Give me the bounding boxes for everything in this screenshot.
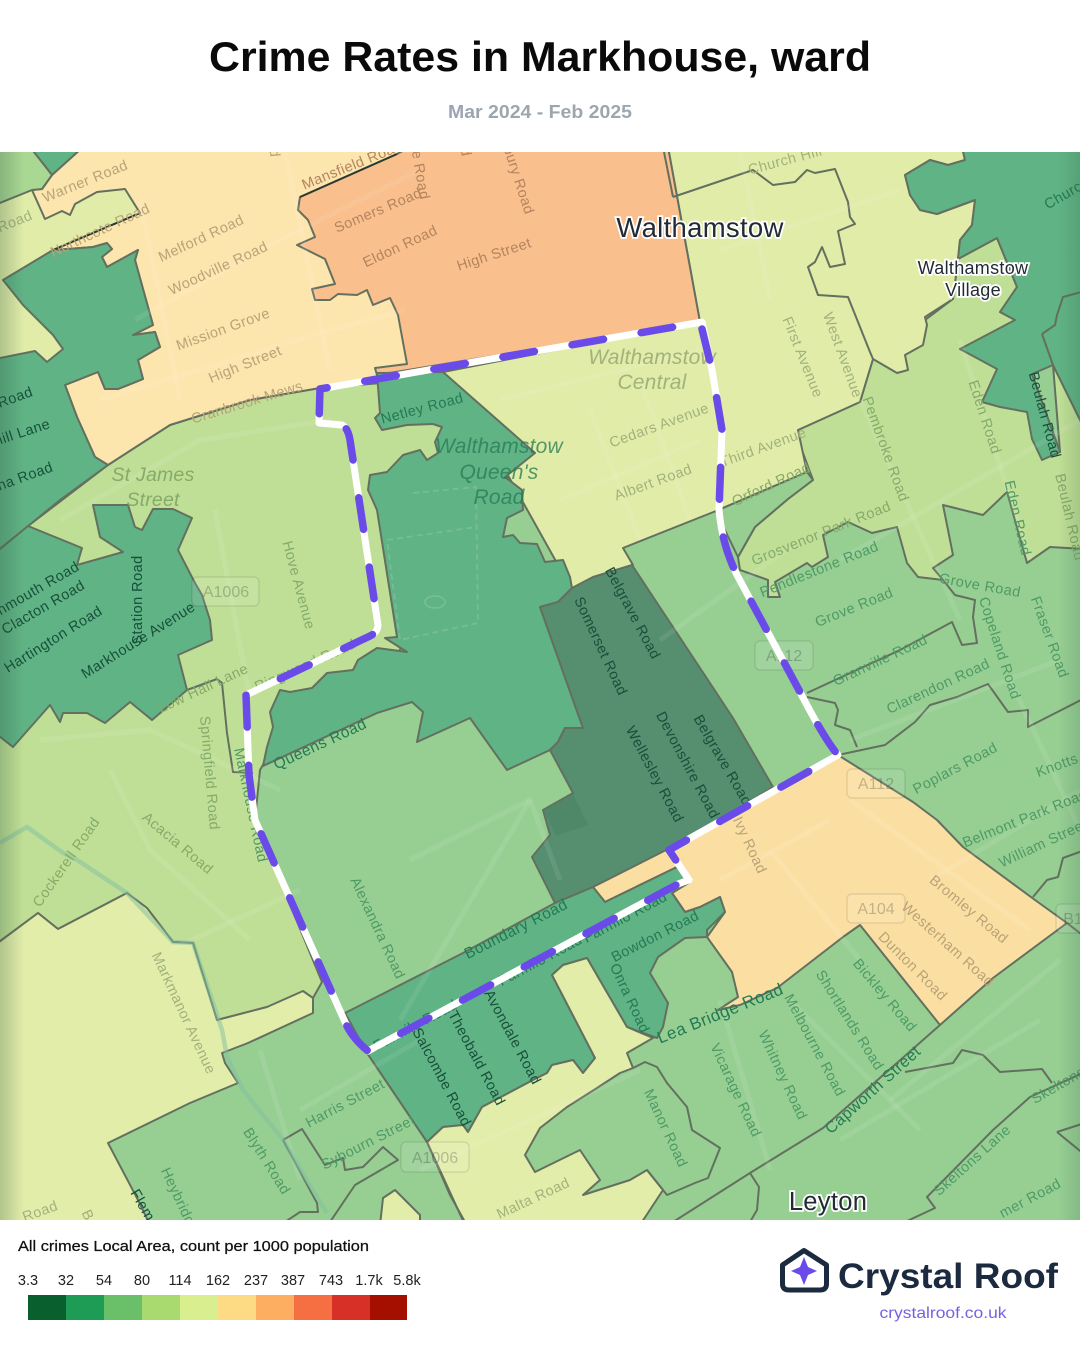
street and place labels: Knotts [1034, 751, 1080, 781]
street and place labels: Alexandra Road [347, 875, 408, 982]
place label: St James Street [112, 468, 194, 506]
street and place labels: bury Road [499, 144, 537, 217]
area: green band, Markhouse Avenue [0, 505, 212, 747]
street and place labels: Onra Road [606, 961, 652, 1036]
street and place labels: Melford Road [156, 212, 247, 266]
street and place labels: Eden Road [965, 378, 1003, 456]
street and place labels: Manor Road [640, 1087, 690, 1170]
street and place labels: Melbourne Road [780, 992, 848, 1099]
street and place labels: Ivy Road [729, 814, 769, 876]
street and place labels: Road [20, 1198, 60, 1226]
street and place labels: Farmilo Road [371, 997, 460, 1055]
faint street network [40, 150, 1080, 1180]
logo wordmark: Crystal Roof [838, 1257, 1058, 1296]
street and place labels: Eldon Road [361, 223, 440, 271]
area: green wedge at Orford Road [716, 472, 813, 557]
street and place labels: B [78, 1207, 96, 1223]
street and place labels: Vicarage Road [706, 1041, 764, 1140]
street and place labels: Church Hill [747, 143, 824, 179]
street and place labels: Sybourn Street [319, 1112, 418, 1173]
shield: A1006 south [401, 1142, 469, 1172]
area: orange band, Walthamstow town centre [297, 147, 700, 375]
street and place labels: Ringwood Road [252, 636, 358, 695]
street and place labels: Springfield Road [196, 715, 222, 831]
street and place labels: Belgrave Road [690, 712, 755, 809]
street and place labels: Heybridge [157, 1165, 201, 1236]
street and place labels: Hartington Road [2, 603, 105, 676]
street and place labels: Theobald Road [444, 1008, 508, 1109]
street and place labels: Clacton Road [0, 578, 88, 638]
legend colour scale [28, 1295, 407, 1320]
street and place labels: Clarendon Road [884, 656, 993, 718]
area: green band, Boundary Road [345, 867, 725, 1142]
street and place labels: Albert Road [612, 461, 694, 504]
place label: Walthamstow Queen's Road: Walthamstow [435, 435, 565, 458]
legend tick labels: 80 [134, 1273, 150, 1289]
street and place labels: Queens Road [271, 715, 369, 773]
place label: Walthamstow Central: Walthamstow [588, 346, 718, 369]
choropleth areas [0, 147, 1080, 1225]
area: green band north-west [0, 243, 160, 549]
street and place labels: Eden Road [1001, 479, 1033, 557]
place label: Walthamstow Village: Walthamstow [918, 258, 1029, 278]
street and place labels: Grove Road [813, 585, 896, 631]
street and place labels: Farmilo Road [581, 889, 670, 947]
street and place labels: Acacia Road [139, 810, 216, 878]
street and place labels: Netley Road [379, 390, 465, 428]
street and place labels: Harris Street [303, 1076, 388, 1131]
legend tick labels: 1.7k [355, 1273, 383, 1289]
park paths: Queen's Road recreation ground [387, 487, 478, 640]
place label: Leyton: Leyton [789, 1188, 867, 1216]
street and place labels: Grove Road [938, 571, 1022, 601]
street and place labels: Woodville Road [166, 239, 271, 299]
legend tick labels: 54 [96, 1273, 112, 1289]
street and place labels: Poplars Road [911, 740, 1000, 798]
place label: Walthamstow Village: Village [945, 280, 1001, 300]
shield: A1006 north [192, 577, 259, 606]
street and place labels: Grosvenor Park Road [749, 499, 893, 569]
place label: Walthamstow: Walthamstow [616, 212, 784, 243]
street and place labels: Warner Road [40, 158, 130, 206]
shield: A112 south [847, 769, 905, 798]
river Dagenham Brook [0, 827, 327, 1213]
legend tick labels: 114 [168, 1273, 192, 1289]
street and place labels: Capworth Street [822, 1043, 925, 1138]
area: pale band north-west [0, 189, 140, 362]
shield: A104: A104 [857, 901, 895, 918]
street and place labels: Salcombe Road [408, 1026, 474, 1129]
street and place labels: High Street [455, 235, 534, 275]
place label: Walthamstow Central [590, 348, 717, 389]
legend tick labels [18, 1273, 421, 1289]
street and place labels: mer Road [997, 1176, 1064, 1222]
street and place labels: Station Road [130, 555, 146, 645]
map edge vignette [0, 152, 1080, 1220]
street and place labels: Westerham Road [898, 899, 997, 990]
street and place labels: Hove Avenue [279, 539, 318, 631]
street and place labels: Skeltons Lane [931, 1122, 1014, 1199]
shield: A112 north: A112 [766, 648, 802, 665]
shield: A1006 south: A1006 [412, 1150, 458, 1167]
street and place labels: Flem [127, 1187, 158, 1224]
shield: A112 north [755, 641, 813, 670]
street and place labels: Boundary Road [462, 896, 571, 963]
street and place labels: Blyth Road [239, 1125, 293, 1198]
legend tick labels: 5.8k [393, 1273, 421, 1289]
logo url: crystalroof.co.uk [880, 1305, 1008, 1322]
street and place labels: Devonshire Road [652, 709, 722, 822]
street and place labels: Wellesley Road [622, 724, 686, 825]
street and place labels: Pembroke Road [859, 395, 911, 504]
area boundary lines [187, 152, 1080, 1222]
street and place labels: Markhouse Avenue [79, 599, 198, 682]
street and place labels: Bickley Road [849, 956, 919, 1035]
legend tick labels: 162 [206, 1273, 230, 1289]
street and place labels: High Street [206, 343, 284, 387]
area: pale band Walthamstow Central [443, 147, 975, 590]
road number shields [192, 577, 1080, 1172]
street and place labels: First Avenue [779, 315, 826, 400]
area: darkest green band, Belgrave Road [532, 565, 773, 903]
street and place labels: d [456, 147, 474, 158]
area: yellow band north-west, High Street [32, 147, 420, 465]
street and place labels: Orford Road [730, 460, 813, 510]
legend tick labels: 743 [319, 1273, 343, 1289]
street and place labels: Northcote Road [48, 201, 153, 261]
legend [18, 1239, 421, 1320]
legend tick labels: 32 [58, 1273, 74, 1289]
street and place labels: e Road [408, 149, 432, 201]
street and place labels: Fraser Road [1027, 594, 1071, 680]
street and place labels: Cedars Avenue [607, 401, 711, 451]
area: top-left green patch [35, 152, 79, 176]
street and place labels: Third Avenue [718, 425, 809, 471]
icon: house with star [782, 1250, 826, 1290]
area: light-green band north-east [738, 238, 1080, 597]
street and place labels: Bowdon Road [609, 908, 702, 966]
place label: Walthamstow Central: Central [617, 371, 688, 394]
street and place labels: Malta Road [494, 1175, 572, 1223]
legend tick labels: 3.3 [18, 1273, 38, 1289]
subtitle: date range: Mar 2024 - Feb 2025 [448, 102, 632, 122]
street and place labels: Shortlands Road [812, 968, 886, 1073]
shield: B road at edge [1056, 904, 1080, 933]
street and place labels: Low Hall Lane [156, 661, 251, 717]
area: pale band south-west, Markmanor Avenue [0, 893, 313, 1225]
logo: Crystal Roof [782, 1250, 1058, 1322]
area: small pale patch south [380, 1190, 420, 1225]
shield: A104 [847, 894, 905, 923]
area: green band, Queen's Road park [263, 372, 583, 770]
street and place labels: Copeland Road [975, 595, 1023, 701]
street and place labels: Farmilo Road [496, 932, 585, 990]
area: light-green band west, St James Street [0, 365, 445, 1020]
area: green band north-east, Church Hill [905, 147, 1080, 460]
place label: Walthamstow Queen's Road: Road [473, 486, 526, 509]
street and place labels: Mansfield Road [300, 138, 405, 193]
shield: A112 south: A112 [858, 776, 894, 793]
base area: mid-green crime band [110, 314, 1080, 1220]
ward boundary: Markhouse [246, 322, 838, 1051]
place label: Walthamstow Queen's Road: Queen's [460, 461, 539, 484]
area: top-left mid-green corner [0, 147, 52, 205]
title: Crime Rates in Markhouse, ward [209, 33, 871, 80]
legend tick labels: 387 [281, 1273, 305, 1289]
place label: St James Street: Street [126, 489, 181, 511]
street and place labels: Dunton Road [875, 929, 950, 1004]
street and place labels: Lea Bridge Road [654, 979, 786, 1047]
place label: St James Street: St James [112, 464, 194, 486]
street and place labels: Granville Road [831, 632, 930, 690]
area: pale band south, Malta Road [427, 958, 663, 1225]
street and place labels: Pendlestone Road [758, 539, 881, 601]
street and place labels: Cranbrook Mews [190, 378, 305, 428]
street and place labels: West Avenue [819, 310, 865, 400]
black road casing lines [53, 154, 397, 250]
street and place labels: Bromley Road [926, 872, 1011, 947]
place label: Walthamstow Village [918, 258, 1029, 300]
street and place labels: d [266, 148, 282, 158]
area: darker block off Wellesley Road [544, 794, 573, 812]
street and place labels: Somers Road [332, 185, 425, 237]
street and place labels: Markhouse Road [230, 746, 270, 864]
legend title: All crimes Local Area, count per 1000 population [18, 1239, 369, 1255]
legend tick labels: 237 [244, 1273, 268, 1289]
street and place labels: Belgrave Road [601, 565, 663, 662]
street and place labels: Beulah Road [1025, 370, 1063, 460]
shield: A1006 north: A1006 [203, 584, 249, 601]
street and place labels: Mission Grove [174, 306, 272, 354]
street and place labels: Whitney Road [754, 1028, 810, 1123]
street and place labels: Somerset Road [570, 595, 630, 698]
street and place labels: Markmanor Avenue [148, 950, 218, 1077]
street and place labels: Cockerell Road [30, 815, 104, 910]
street and place labels: Avondale Road [480, 987, 544, 1087]
place label: Walthamstow Queen's Road [437, 438, 564, 504]
area: yellow band south-east, Lea Bridge [593, 755, 1067, 1025]
